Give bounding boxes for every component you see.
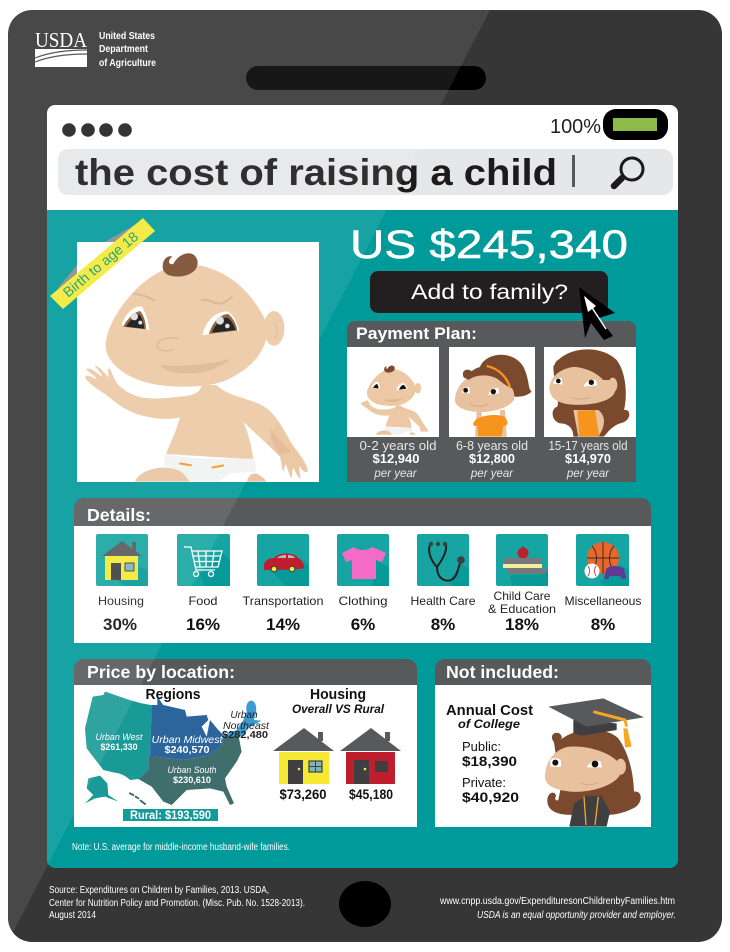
category: clothing: 6% [351, 615, 375, 634]
category: miscellaneous: Miscellaneous [564, 594, 642, 608]
category: miscellaneous: 8% [591, 615, 615, 634]
screen top bar [47, 105, 678, 210]
source credit: Source: Expenditures on Children by Families, 2013. USDA, [49, 885, 269, 896]
home button [339, 881, 391, 927]
heading: price by location: Price by location: [87, 662, 235, 682]
card: 15-17 years old: $14,970 [565, 451, 611, 466]
text cursor [572, 155, 575, 187]
battery percentage: 100% [550, 116, 601, 138]
label: urban midwest: $240,570 [164, 744, 210, 756]
private college cost: Private: [462, 776, 506, 790]
panel: large baby portrait [77, 242, 319, 482]
agency name: Department [99, 44, 149, 55]
category: child care and education: & Education [488, 602, 556, 616]
public college cost [462, 740, 517, 769]
website and equal opportunity statement: www.cnpp.usda.gov/ExpendituresonChildrenbyFamilies.htm [439, 896, 675, 907]
search bar [58, 149, 673, 195]
panel: not included [435, 659, 651, 827]
category: child care and education: 18% [505, 615, 539, 634]
category: clothing: Clothing [338, 594, 388, 608]
label: urban midwest: Urban Midwest [152, 734, 224, 746]
total cost: US $245,340 [350, 223, 628, 267]
category: child care and education: Child Care [494, 589, 551, 603]
icon: stethoscope [417, 534, 469, 586]
card: 6-8 years old [449, 347, 535, 480]
card: 0-2 years old: $12,940 [372, 451, 420, 466]
heading: payment plan: Payment Plan: [356, 324, 477, 343]
card: 0-2 years old: 0-2 years old [360, 439, 437, 453]
private college cost: $40,920 [462, 789, 519, 805]
category: health care [410, 534, 476, 634]
label: urban west: Urban West [96, 732, 143, 743]
category: child care and education [488, 534, 556, 634]
panel: details [74, 498, 651, 643]
public college cost: Public: [462, 740, 501, 754]
ribbon shadow [58, 222, 150, 296]
panel: price by location [74, 659, 417, 827]
source credit: August 2014 [49, 910, 96, 921]
source credit: Center for Nutrition Policy and Promotion. (Misc. Pub. No. 1528-2013). [49, 898, 305, 909]
ribbon: Birth to age 18 [50, 218, 155, 309]
title: the cost of raising a child [75, 152, 557, 193]
category: transportation: 14% [266, 615, 300, 634]
card: 6-8 years old: $12,800 [469, 451, 515, 466]
label: urban northeast: Northeast [223, 721, 270, 732]
category: housing [96, 534, 148, 634]
icon: books and apple [496, 534, 548, 586]
panel: payment plan [347, 321, 636, 482]
agency name: of Agriculture [99, 58, 156, 69]
category: housing: Housing [98, 594, 144, 608]
category: transportation: Transportation [242, 594, 324, 608]
heading: housing: Overall VS Rural [292, 704, 385, 716]
agency name [99, 31, 156, 69]
label: urban south [168, 765, 216, 786]
icon: mouse cursor [579, 287, 615, 340]
card: 0-2 years old [347, 347, 439, 480]
label: urban south: $230,610 [173, 775, 211, 786]
label: urban northeast: Urban [230, 710, 258, 721]
category: health care: Health Care [410, 594, 476, 608]
icon: shopping cart [177, 534, 230, 586]
label: urban midwest [152, 734, 224, 756]
card: 15-17 years old [544, 347, 636, 480]
icon: house [96, 534, 148, 586]
category: housing: 30% [103, 615, 137, 634]
battery icon [603, 109, 668, 140]
college cost heading: of College [458, 719, 521, 731]
source credit [49, 885, 305, 921]
button: add to family [370, 271, 608, 313]
screen glare [8, 10, 490, 942]
note: Note: U.S. average for middle-income husband-wife families. [72, 842, 290, 853]
icon: overall house [273, 728, 334, 784]
category: food [177, 534, 230, 634]
label: urban south: Urban South [168, 765, 216, 776]
speaker slot [246, 66, 486, 90]
heading: details: Details: [87, 505, 151, 525]
USDA logo [35, 28, 88, 67]
website and equal opportunity statement: USDA is an equal opportunity provider and employer. [477, 910, 676, 921]
category: food: 16% [186, 615, 220, 634]
map of US regions [85, 692, 270, 805]
label: urban northeast [222, 710, 270, 741]
overall housing price: $73,260 [280, 786, 327, 802]
label: urban northeast: $282,480 [222, 729, 268, 741]
agency name: United States [99, 31, 155, 42]
college cost heading: Annual Cost [446, 703, 533, 719]
icon: rural house [340, 728, 401, 784]
heading: housing: Housing [310, 687, 366, 703]
signal dots [62, 123, 132, 137]
heading: housing [292, 687, 385, 716]
card: 6-8 years old: per year [470, 468, 514, 480]
icon: car [257, 534, 309, 586]
category: food: Food [188, 594, 218, 608]
card: 15-17 years old: per year [566, 468, 610, 480]
category: clothing [337, 534, 389, 634]
category: transportation [242, 534, 324, 634]
button: add to family: Add to family? [411, 281, 568, 304]
category: health care: 8% [431, 615, 455, 634]
icon: magnifier [614, 158, 643, 186]
category: miscellaneous [564, 534, 642, 634]
icon: ball and game controller [576, 534, 629, 586]
card: 15-17 years old: 15-17 years old [548, 439, 628, 453]
rural price banner: Rural: $193,590 [130, 810, 211, 822]
heading: not included: Not included: [446, 662, 559, 682]
card: 0-2 years old: per year [373, 468, 418, 480]
rural housing price: $45,180 [349, 786, 393, 802]
USDA logo: USDA [35, 28, 88, 52]
college cost heading [446, 703, 533, 731]
website and equal opportunity statement [439, 896, 676, 921]
label: urban west [96, 732, 143, 753]
public college cost: $18,390 [462, 753, 517, 769]
illustration: graduate [545, 698, 644, 827]
card: 6-8 years old: 6-8 years old [456, 439, 528, 453]
icon: shirt [337, 534, 389, 586]
screen teal area [47, 210, 678, 868]
private college cost [462, 776, 519, 805]
heading: regions: Regions [146, 687, 200, 703]
label: urban west: $261,330 [100, 742, 138, 753]
ribbon: Birth to age 18: Birth to age 18 [60, 228, 141, 300]
